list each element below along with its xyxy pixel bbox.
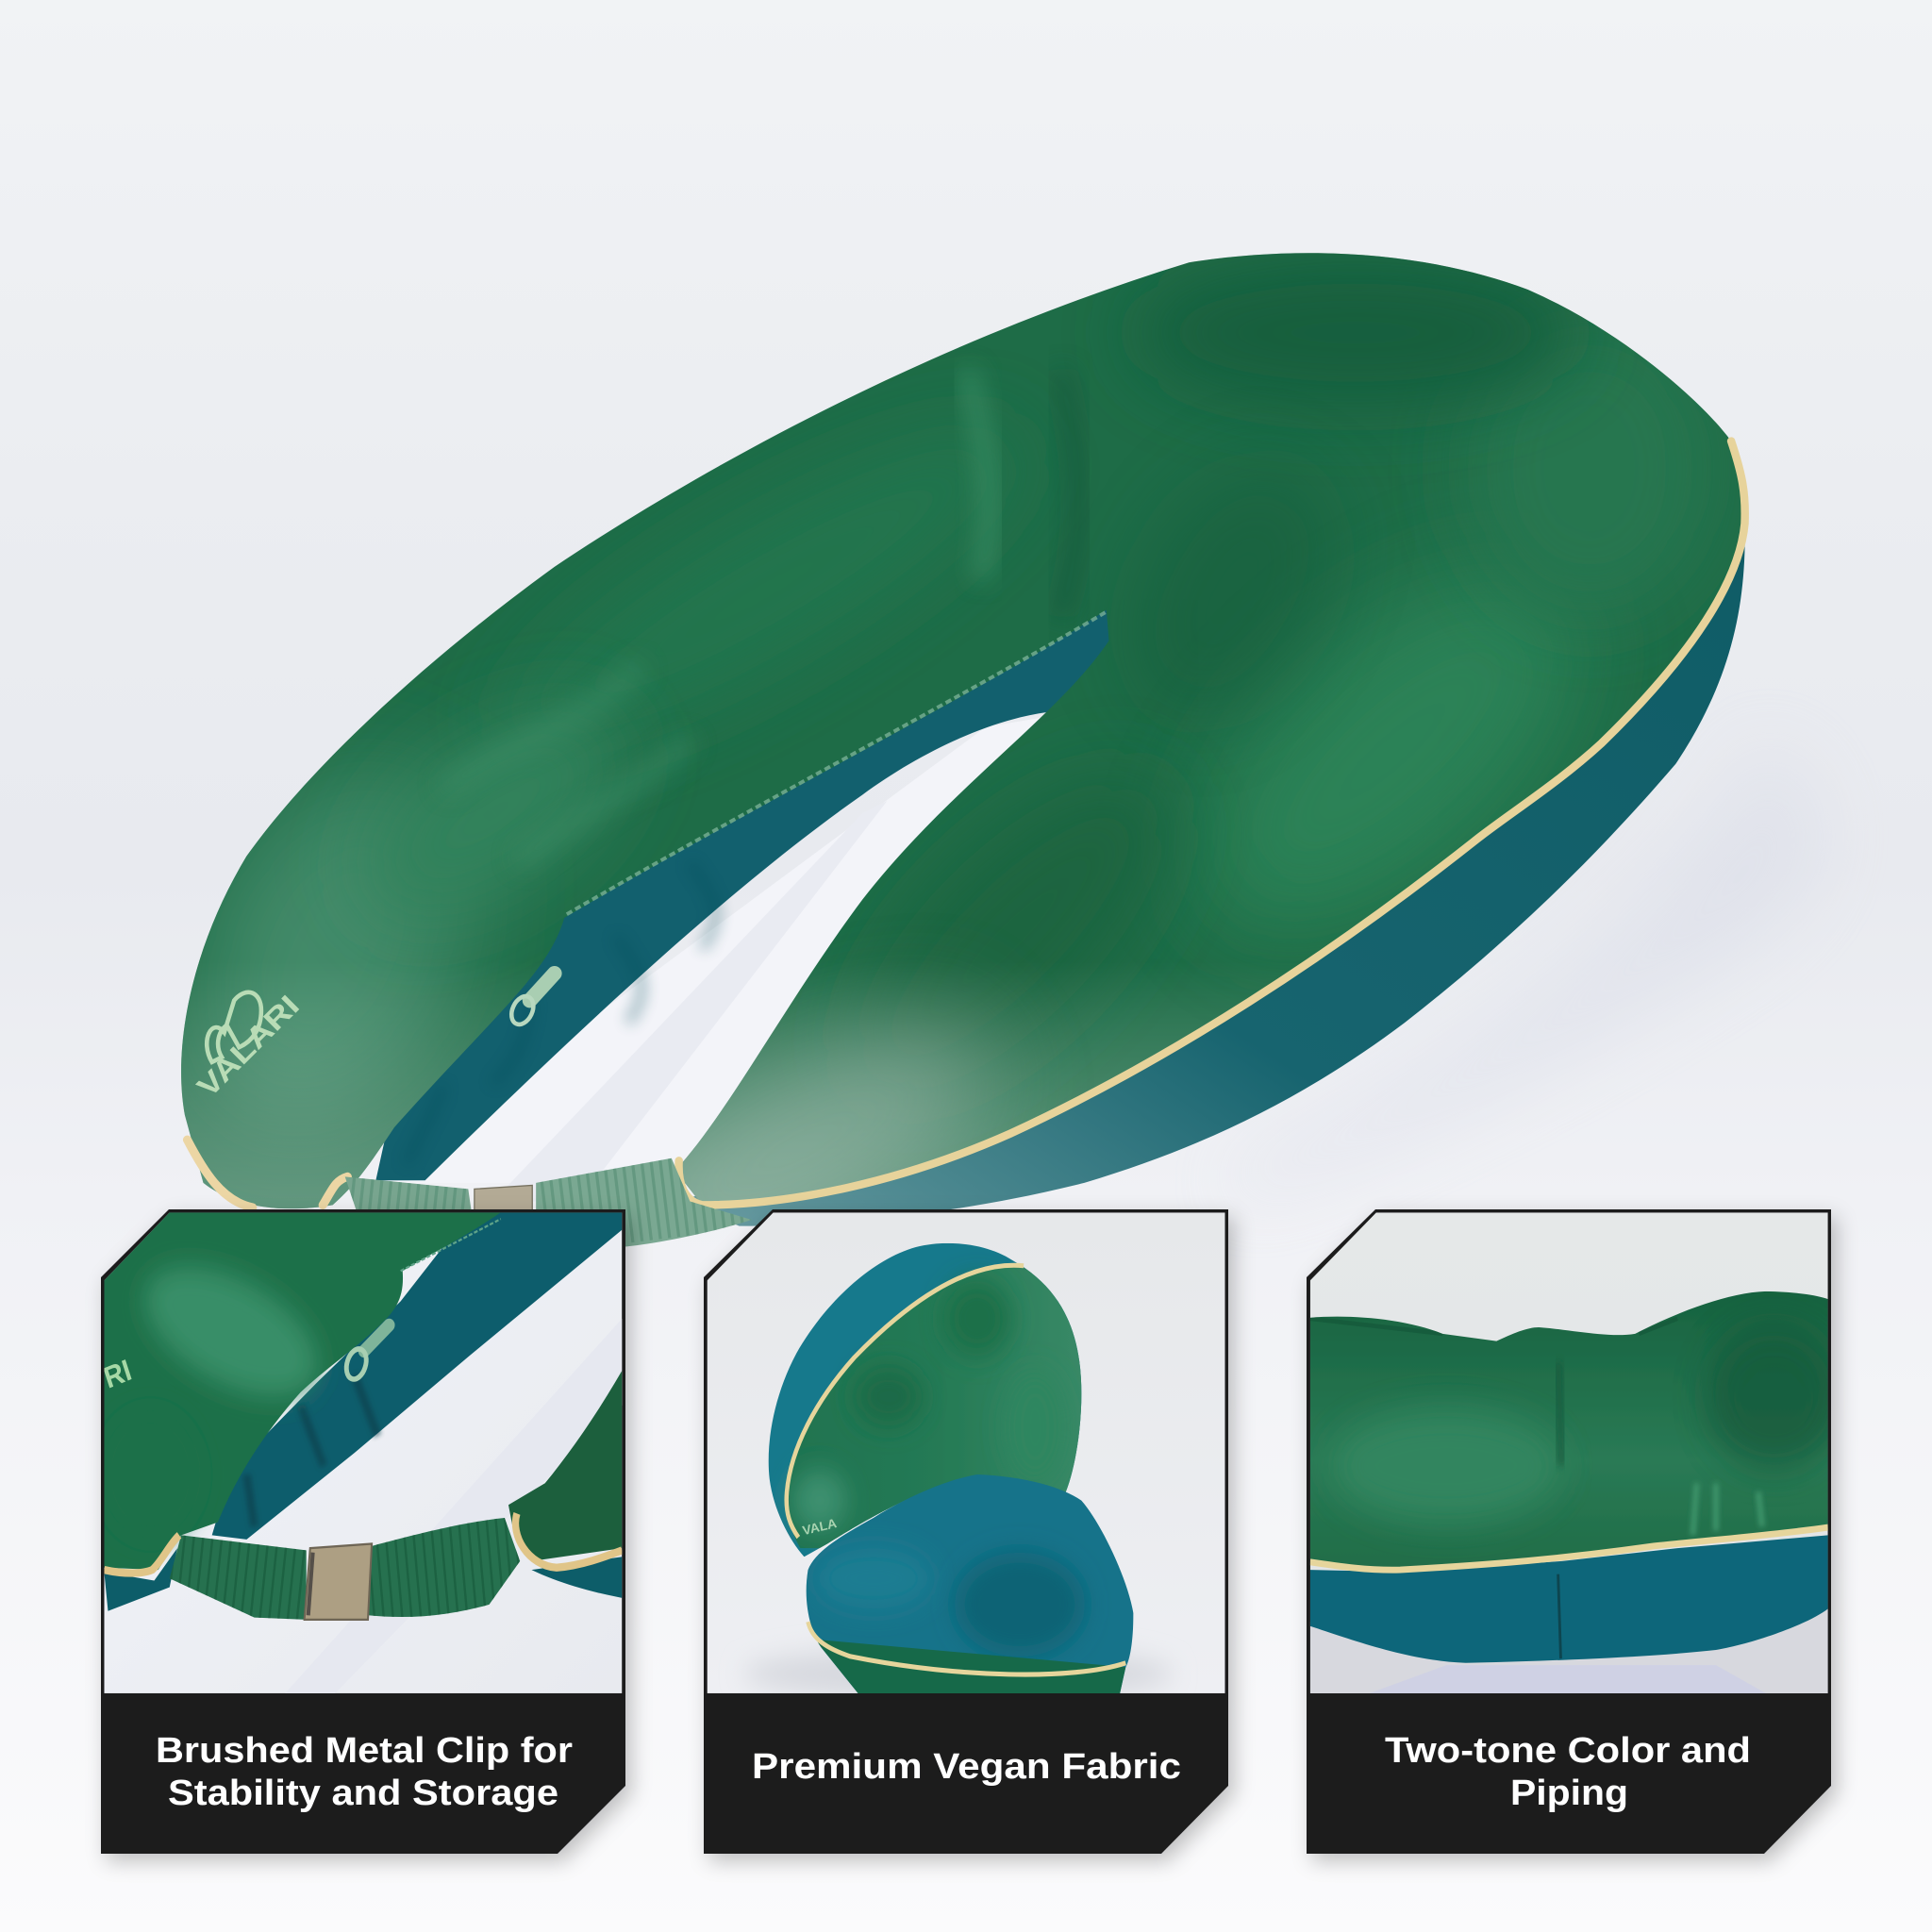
fabric fold	[492, 801, 887, 1201]
card photo: VALA	[801, 1515, 839, 1538]
card photo: RI	[100, 1353, 136, 1395]
green velvet top	[181, 253, 1741, 1209]
panel: two-tone color and piping	[1307, 1209, 1843, 1854]
card photo	[708, 1212, 1225, 1700]
card outline and caption background	[1307, 1209, 1831, 1854]
caption: fabric: Premium Vegan Fabric	[752, 1747, 1181, 1787]
seam stitching	[567, 612, 1106, 914]
white fabric inside the opening	[370, 715, 1059, 1183]
blue underside: inner arm	[375, 601, 1119, 1180]
strap: right	[536, 1158, 752, 1247]
card photo	[1310, 1212, 1843, 1693]
piping: left end	[188, 1140, 347, 1208]
strap ribs	[351, 1171, 764, 1205]
caption: clip	[156, 1731, 573, 1813]
zipper pull	[508, 974, 555, 1028]
floor shadow	[1232, 740, 1823, 1201]
card photo	[100, 1212, 622, 1693]
inner arm pleats	[407, 862, 716, 1164]
brand logo: VALARI: VALARI	[191, 989, 306, 1104]
strap: left	[345, 1176, 475, 1232]
blue underside: outer arm	[677, 524, 1745, 1226]
buckle	[475, 1185, 532, 1210]
caption: two-tone	[1385, 1731, 1751, 1813]
panel: premium vegan fabric	[704, 1209, 1228, 1854]
card outline and caption background	[101, 1209, 625, 1854]
caption: clip: Stability and Storage	[168, 1774, 558, 1813]
card outline and caption background	[704, 1209, 1228, 1854]
caption: clip: Brushed Metal Clip for	[156, 1731, 573, 1771]
piping: outer arm	[679, 441, 1745, 1205]
caption: two-tone: Piping	[1510, 1774, 1628, 1813]
main product photo: nursing pillow	[181, 253, 1749, 1247]
caption: two-tone: Two-tone Color and	[1385, 1731, 1751, 1771]
panel: brushed metal clip	[100, 1209, 625, 1854]
